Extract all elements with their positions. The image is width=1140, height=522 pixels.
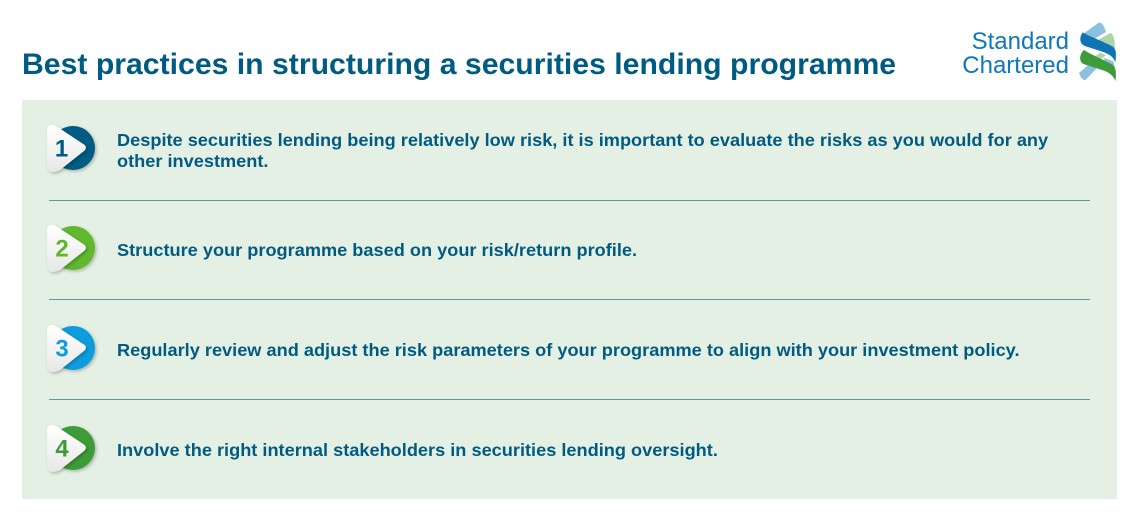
practice 4 text: Involve the right internal stakeholders in securities lending oversight. [117,440,718,460]
icon: number 1 [47,125,95,172]
logo: Standard Chartered [962,22,1116,81]
icon: number 2 [47,225,95,272]
title: Best practices in structuring a securities lending programme [22,48,896,81]
icon: number 1: 1 [55,136,68,162]
icon: number 4: 4 [55,436,69,462]
practice 2 text: Structure your programme based on your risk/return profile. [117,240,637,260]
icon: number 3 [47,325,95,372]
logo: Standard Chartered: Chartered [962,52,1069,79]
dividers [49,200,1090,201]
icon: number 4 [47,425,95,472]
practice 3 text: Regularly review and adjust the risk parameters of your programme to align with your investment policy. [117,340,1020,360]
logo: Standard Chartered: Standard [972,28,1069,55]
practice 1 text: Despite securities lending being relatively low risk, it is important to evaluate the risks as you would for any [117,130,1048,150]
icon: number 2: 2 [55,236,69,262]
practice 1 text: other investment. [117,151,268,171]
icon: number 3: 3 [55,336,69,362]
panel: practices [22,100,1117,499]
practice 1 text [117,130,1048,171]
